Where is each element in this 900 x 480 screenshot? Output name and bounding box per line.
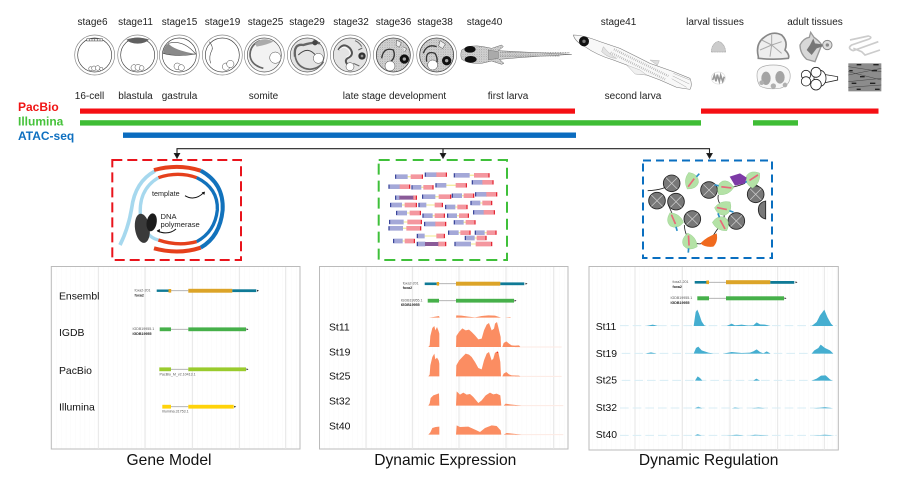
stage labels: stage38	[417, 17, 453, 28]
track label: IGDB: IGDB	[59, 328, 84, 339]
track label: Illumina: Illumina	[59, 403, 95, 414]
icon: stage19 embryo	[202, 35, 242, 75]
gene track: IGDB19955: IGDB19955.1	[401, 298, 422, 302]
developmental period labels: first larva	[488, 91, 529, 102]
stage labels: stage41	[601, 17, 637, 28]
larvae and tissue drawings	[461, 32, 881, 91]
icon: adult tissue intestine	[850, 36, 880, 55]
developmental period labels: somite	[249, 91, 279, 102]
gene track: IGDB19955	[401, 298, 516, 307]
gene track: foxa2-201: foxa2-201	[403, 282, 419, 286]
track labels: stages: St25	[329, 372, 351, 383]
stage labels: stage32	[333, 17, 369, 28]
icon: adult tissue liver	[757, 33, 789, 59]
legend: technology labels	[18, 100, 74, 143]
icon: larval tissue bottom	[711, 72, 725, 84]
icon: adult tissue gonad	[757, 65, 790, 89]
heading: Dynamic Regulation: Dynamic Regulation	[639, 452, 778, 469]
gene track: IGDB	[132, 327, 248, 336]
track labels: stages: St40	[329, 422, 351, 433]
stage labels: stage11	[118, 17, 153, 28]
gene track: Ensembl: foxa2-201	[134, 288, 150, 292]
track label: PacBio: PacBio	[59, 366, 92, 377]
chart: ATAC-seq signal tracks	[620, 310, 837, 436]
stage labels: stage19	[205, 17, 241, 28]
panel: Gene Model	[51, 266, 300, 449]
stage labels: adult tissues	[787, 17, 843, 28]
track labels: stages: St25	[596, 376, 617, 387]
developmental period labels: 16-cell	[75, 91, 104, 102]
gene track: PacBio: PacBio_M_v2.10413.1	[160, 372, 196, 376]
track labels: stages: St11	[329, 322, 350, 333]
icon: stage25 embryo	[244, 35, 284, 75]
icon: adult tissue brain	[801, 67, 838, 90]
track label: Ensembl: Ensembl	[59, 292, 99, 303]
icon: stage15 embryo	[159, 35, 199, 75]
stage labels: stage36	[376, 17, 412, 28]
developmental period labels	[75, 91, 662, 102]
developmental period labels: late stage development	[343, 91, 446, 102]
chart: paired-end reads	[389, 173, 497, 246]
icon: stage32 embryo	[330, 35, 370, 75]
developmental period labels: blastula	[118, 91, 153, 102]
legend: technology labels: ATAC-seq	[18, 129, 74, 143]
label: DNA polymerase: polymerase	[160, 220, 200, 229]
icon: stage36 embryo	[373, 35, 413, 75]
track labels: stages: St11	[596, 322, 617, 333]
stage labels	[77, 17, 843, 28]
icon: stage41 larva	[573, 35, 691, 89]
icon: stage38 embryo	[417, 35, 457, 75]
track labels: stages	[596, 322, 617, 441]
icon: stage6 embryo	[75, 35, 115, 75]
gene track: IGDB19955: IGDB19955	[401, 303, 420, 307]
track labels: stages: St32	[329, 397, 351, 408]
stage labels: stage40	[467, 17, 503, 28]
panel: PacBio circular sequencing diagram	[112, 160, 241, 260]
arrows: connector to three panels	[174, 149, 712, 158]
stage labels: stage15	[162, 17, 198, 28]
stage labels: stage29	[289, 17, 325, 28]
heading: Gene Model: Gene Model	[127, 452, 211, 469]
gene track: PacBio	[159, 367, 248, 376]
legend: technology labels: PacBio	[18, 100, 59, 114]
label: template: template	[152, 189, 180, 198]
embryo stages row	[75, 35, 457, 75]
gene track: IGDB19955: IGDB19955	[670, 301, 689, 305]
gene track: IGDB19955: IGDB19955.1	[670, 296, 692, 300]
icon: adult tissue heart	[800, 32, 832, 62]
gene track: IGDB19955	[670, 296, 786, 305]
panel: Illumina short reads diagram	[379, 160, 507, 260]
track labels: stages	[329, 322, 351, 433]
chart: nucleosomes and transcription factors	[648, 169, 766, 253]
gene track: Illumina: Illumina.31753.1	[162, 410, 189, 414]
heading: Dynamic Expression: Dynamic Expression	[374, 452, 516, 469]
developmental period labels: gastrula	[162, 91, 198, 102]
gene track: foxa2-201: foxa2-201	[672, 280, 688, 284]
stage labels: larval tissues	[686, 17, 744, 28]
gene track: foxa2-201	[403, 282, 528, 290]
stage labels: stage25	[248, 17, 284, 28]
chart: RNA-seq coverage tracks	[428, 315, 563, 435]
label: DNA polymerase: DNA	[160, 212, 177, 221]
panel: ATAC-seq chromatin diagram	[643, 160, 772, 258]
sampling coverage bars	[80, 108, 878, 138]
panel: Dynamic Expression	[320, 266, 568, 449]
track labels: stages: St19	[329, 347, 351, 358]
panel: Dynamic Regulation	[589, 266, 838, 450]
developmental period labels: second larva	[605, 91, 662, 102]
icon: stage29 embryo	[287, 35, 327, 75]
gene track: Ensembl: foxa2	[134, 293, 144, 297]
gene track: IGDB: IGDB19955	[132, 332, 151, 336]
gene track: Ensembl	[134, 288, 259, 297]
gene track: Illumina	[162, 405, 236, 414]
icon: stage40 larva	[461, 45, 572, 64]
icon: circular template	[120, 167, 223, 252]
gene track: foxa2-201	[672, 280, 798, 289]
icon: adult tissue muscle	[848, 63, 881, 91]
gene track: foxa2-201: foxa2	[403, 286, 412, 290]
track labels: stages: St19	[596, 349, 617, 360]
gene track: foxa2-201: foxa2	[672, 285, 682, 289]
track labels: stages: St40	[596, 430, 617, 441]
legend: technology labels: Illumina	[18, 114, 64, 128]
gene track: IGDB: IGDB19955.1	[132, 327, 154, 331]
track labels: stages: St32	[596, 403, 617, 414]
stage labels: stage6	[77, 17, 108, 28]
icon: stage11 embryo	[118, 35, 158, 75]
icon: larval tissue top	[711, 41, 726, 52]
